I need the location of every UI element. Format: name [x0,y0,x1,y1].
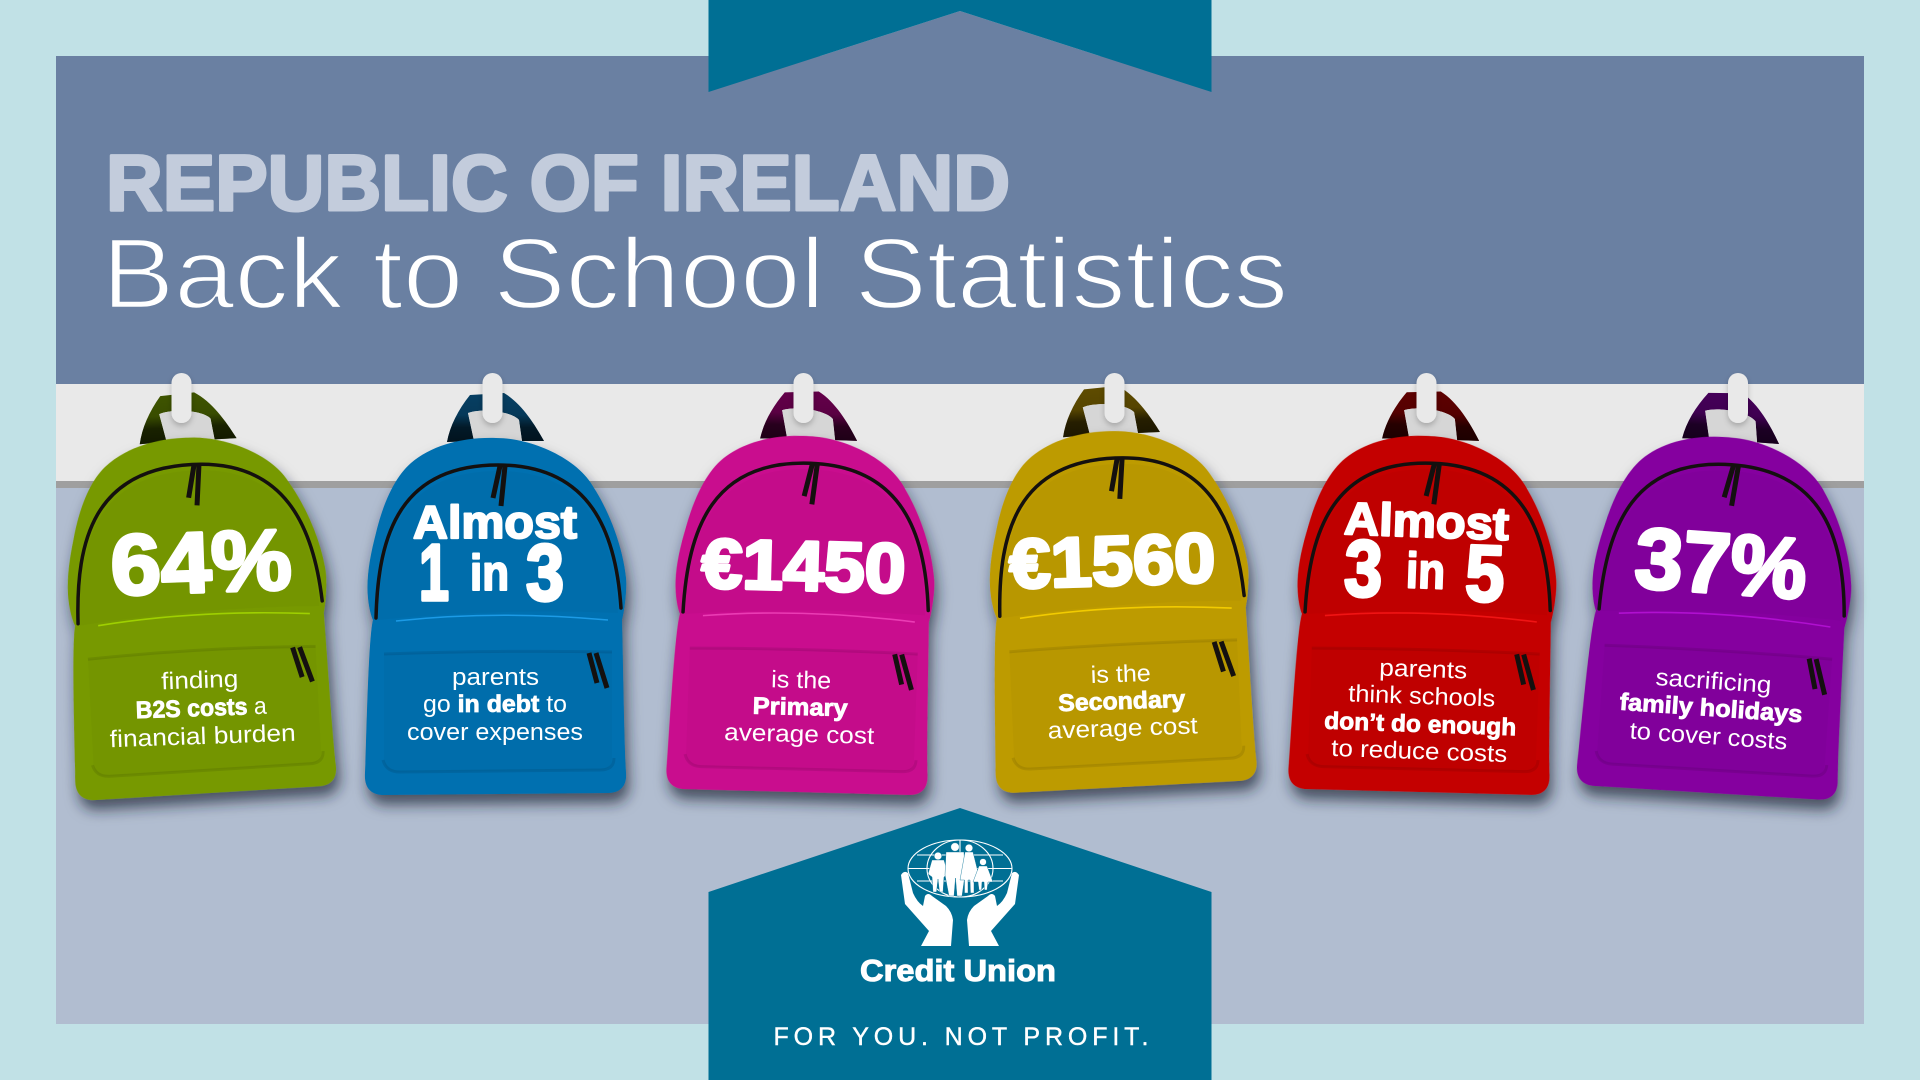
stat: Almost 3 in 5: 5 [1464,528,1506,619]
caption [1047,660,1199,745]
caption: go in debt to [423,691,567,718]
logo wordmark: Credit Union [860,953,1056,988]
heading: Back to School Statistics: Back to School Statistics [102,218,1288,330]
bag drawing [979,381,1258,794]
caption: parents [1379,654,1468,685]
stat: 64%: 64% [109,512,293,614]
stat: Almost 3 in 5 [1343,492,1510,619]
stat: Almost 1 in 3: 1 [419,528,449,617]
caption: Primary [752,693,849,722]
caption: think schools [1348,680,1496,713]
panel: wall band [56,384,1864,481]
caption: Secondary [1058,686,1186,717]
backpack 5: red, Almost 3 in 5 [1288,373,1563,798]
panel: lower wall [56,488,1864,1024]
caption: is the [1090,660,1151,689]
caption [724,666,875,750]
caption: family holidays [1619,689,1803,728]
caption: to reduce costs [1331,735,1508,768]
heading: Republic of Ireland: REPUBLIC OF IRELAND [106,138,1010,227]
caption: finding [161,666,239,695]
caption: financial burden [109,720,296,753]
caption [109,666,296,753]
bag drawing [1576,384,1864,803]
hook [482,373,502,423]
bag drawing [666,387,941,798]
backpack 6: purple, 37% [1576,373,1864,803]
icon: Credit Union logo globe, family and hands [901,840,1019,946]
stat: Almost 3 in 5: 3 [1343,523,1384,614]
caption [1619,664,1803,755]
stat: Almost 1 in 3: in [470,545,509,601]
caption: is the [771,666,832,695]
bag drawing [55,386,337,801]
stat: Almost 3 in 5: Almost [1343,492,1510,550]
caption: parents [452,664,539,691]
caption: B2S costs a [135,693,268,724]
stat: 37%: 37% [1632,510,1810,618]
caption: average cost [1047,712,1199,745]
stat: €1560: €1560 [1008,519,1216,603]
panel: title area [56,56,1864,384]
caption [1324,654,1517,768]
bag drawing [365,393,626,795]
caption: sacrificing [1655,664,1772,699]
hook [172,373,192,423]
caption: average cost [724,719,875,750]
backpack 4: gold, €1560 [979,373,1258,794]
stat: Almost 1 in 3 [413,496,577,617]
stat: €1450: €1450 [701,524,907,608]
backpack 1: green, 64% [55,373,337,801]
top notched banner [708,0,1212,92]
hook [1104,373,1124,423]
caption: to cover costs [1629,718,1788,755]
hook [794,373,814,423]
hook [1416,373,1436,423]
caption: don’t do enough [1324,708,1517,741]
backpack 2: blue, Almost 1 in 3 [365,373,626,795]
backpack 3: magenta, €1450 [666,373,941,798]
caption: cover expenses [407,719,583,746]
stat: Almost 3 in 5: in [1405,542,1446,600]
bottom logo house panel [708,808,1212,1080]
tagline: FOR YOU. NOT PROFIT. [774,1023,1148,1051]
stat: Almost 1 in 3: 3 [526,528,564,617]
caption [407,664,583,746]
stat: Almost 1 in 3: Almost [413,496,577,548]
hook [1728,373,1748,423]
bag drawing [1288,387,1563,798]
